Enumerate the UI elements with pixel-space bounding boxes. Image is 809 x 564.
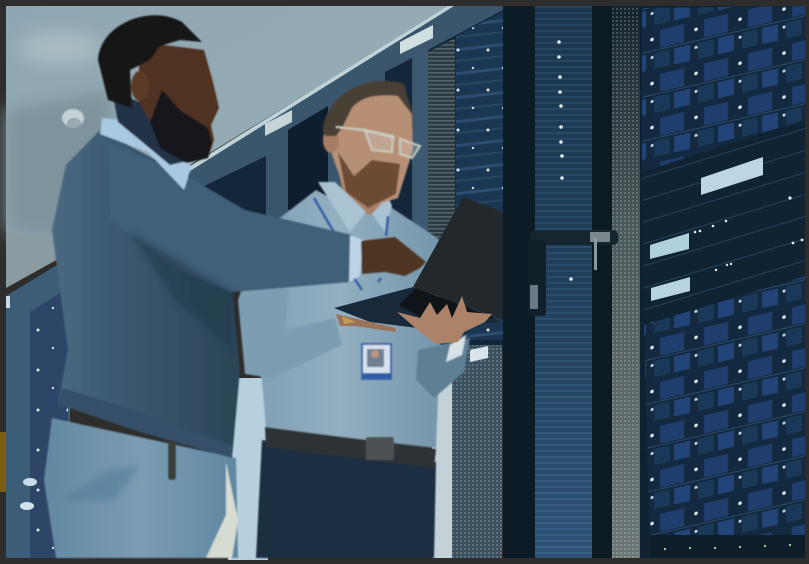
ear — [323, 127, 339, 153]
trousers — [44, 418, 238, 558]
neck — [340, 178, 392, 216]
ear — [131, 71, 149, 101]
shirt collar — [100, 118, 192, 190]
right sleeve — [416, 338, 470, 398]
middle background rack panels — [196, 48, 428, 248]
torso shirt — [240, 190, 440, 448]
left sleeve — [238, 232, 342, 378]
pale aisle behind figures — [228, 378, 268, 560]
arm shadow — [130, 232, 232, 350]
shirt cuff — [349, 235, 363, 282]
person left: technician in grey sweater — [44, 15, 426, 558]
left wall band — [6, 232, 60, 288]
hair — [98, 15, 202, 108]
pointing hand — [361, 237, 426, 276]
trousers — [256, 440, 436, 558]
lanyard — [314, 198, 388, 290]
laptop — [334, 197, 503, 328]
ceiling lower shade — [6, 90, 120, 240]
ceiling panel highlight — [18, 32, 102, 64]
rack tops running back along the ceiling — [187, 6, 505, 240]
rack label strips — [265, 25, 433, 136]
smoke detector — [62, 109, 84, 128]
glowing display panels — [650, 157, 763, 301]
dark frame right — [592, 6, 612, 558]
near centre rack door — [428, 10, 503, 558]
hair — [323, 81, 413, 136]
face — [138, 42, 219, 162]
centre server column — [535, 6, 593, 558]
beard — [150, 90, 212, 163]
hand under laptop left — [336, 314, 396, 332]
white cuff — [446, 335, 466, 362]
head — [332, 88, 413, 208]
right large server rack — [640, 6, 805, 558]
door frame — [503, 6, 537, 558]
rear pocket shading — [62, 465, 140, 500]
status lights — [664, 196, 803, 550]
hand holding laptop — [397, 296, 492, 344]
sweater body — [52, 130, 240, 458]
neck — [112, 90, 192, 165]
person right: technician with laptop — [238, 81, 470, 558]
glasses — [336, 127, 420, 158]
id badge — [361, 343, 392, 380]
belt buckle — [366, 437, 394, 460]
belt — [265, 427, 436, 468]
pale trouser side — [206, 462, 238, 558]
sweater arm — [108, 142, 352, 292]
grey perforated column — [612, 6, 640, 558]
beard — [338, 152, 400, 208]
left server rack — [6, 262, 70, 558]
door handle — [528, 230, 618, 316]
amber sliver on the left edge — [0, 432, 6, 492]
keychain — [168, 442, 176, 480]
sweater hem — [58, 388, 232, 458]
ceiling — [6, 6, 450, 262]
collar — [318, 182, 392, 232]
